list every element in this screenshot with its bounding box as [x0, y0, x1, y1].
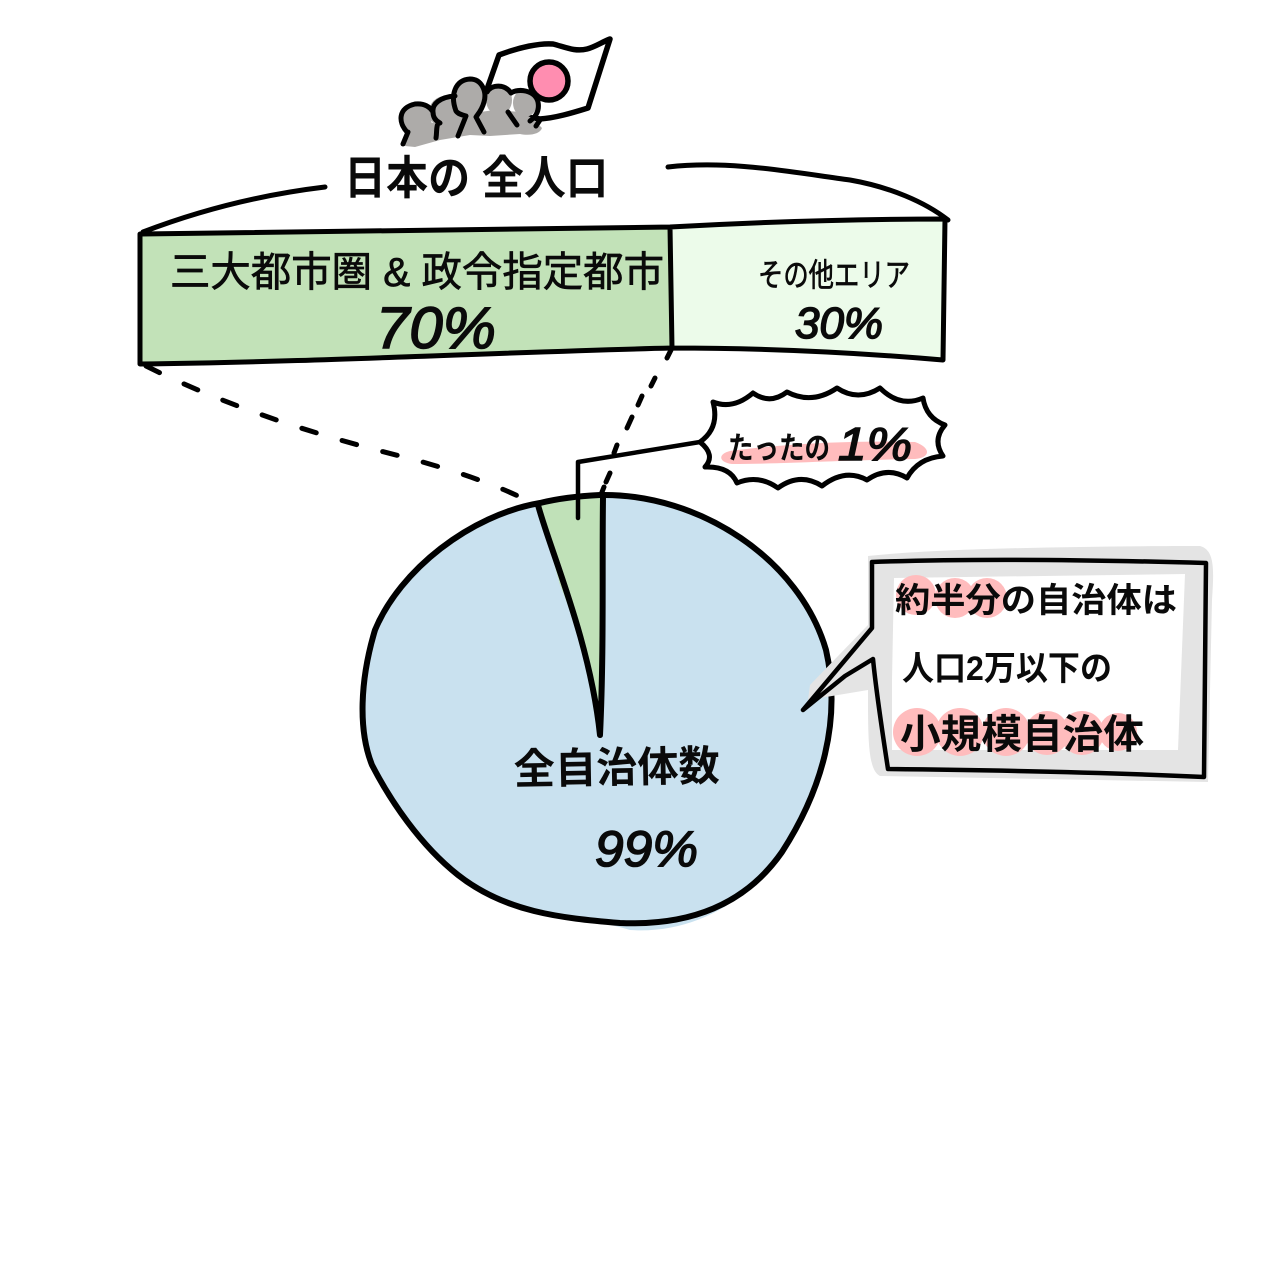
- brace: top bracket: [143, 165, 948, 232]
- callout: only 1%: [578, 388, 945, 518]
- callout shadow: [808, 546, 1213, 782]
- callout inner panel: [892, 574, 1185, 750]
- pink highlights: [893, 575, 1137, 756]
- callout line 3: 小規模自治体: [900, 713, 1144, 757]
- panel: population bar: [140, 219, 945, 364]
- bar segment: metropolitan 70%: [140, 227, 672, 364]
- leader line: [578, 442, 700, 518]
- callout line 1: 約半分の自治体は: [895, 582, 1177, 620]
- label: metropolitan: 三大都市圏 & 政令指定都市: [170, 249, 664, 295]
- icon: crowd with Japanese flag: [400, 39, 610, 147]
- label: other area: その他エリア: [758, 257, 910, 293]
- callout value: 1%: [838, 418, 912, 470]
- pie chart: [363, 495, 832, 930]
- bar segment: other area 30%: [670, 219, 945, 360]
- dashed connectors: [146, 350, 671, 498]
- callout line 2: 人口2万以下の: [902, 650, 1112, 688]
- bar outline: [140, 219, 945, 364]
- highlight: [721, 442, 927, 464]
- title: 日本の 全人口: [344, 152, 608, 204]
- value: 70%: 70%: [376, 296, 496, 361]
- callout: small municipalities: [803, 546, 1213, 782]
- value: 30%: 30%: [795, 299, 883, 348]
- callout text: たったの: [728, 431, 830, 466]
- pie fill: 99%: [363, 495, 832, 930]
- value: 99%: 99%: [595, 821, 698, 877]
- pie outline: [363, 495, 832, 923]
- burst bubble: [700, 388, 945, 488]
- label: total municipalities: 全自治体数: [513, 742, 720, 793]
- callout outline: [803, 560, 1206, 777]
- pie slice: 1%: [538, 496, 603, 735]
- pie slice outline: [538, 497, 603, 735]
